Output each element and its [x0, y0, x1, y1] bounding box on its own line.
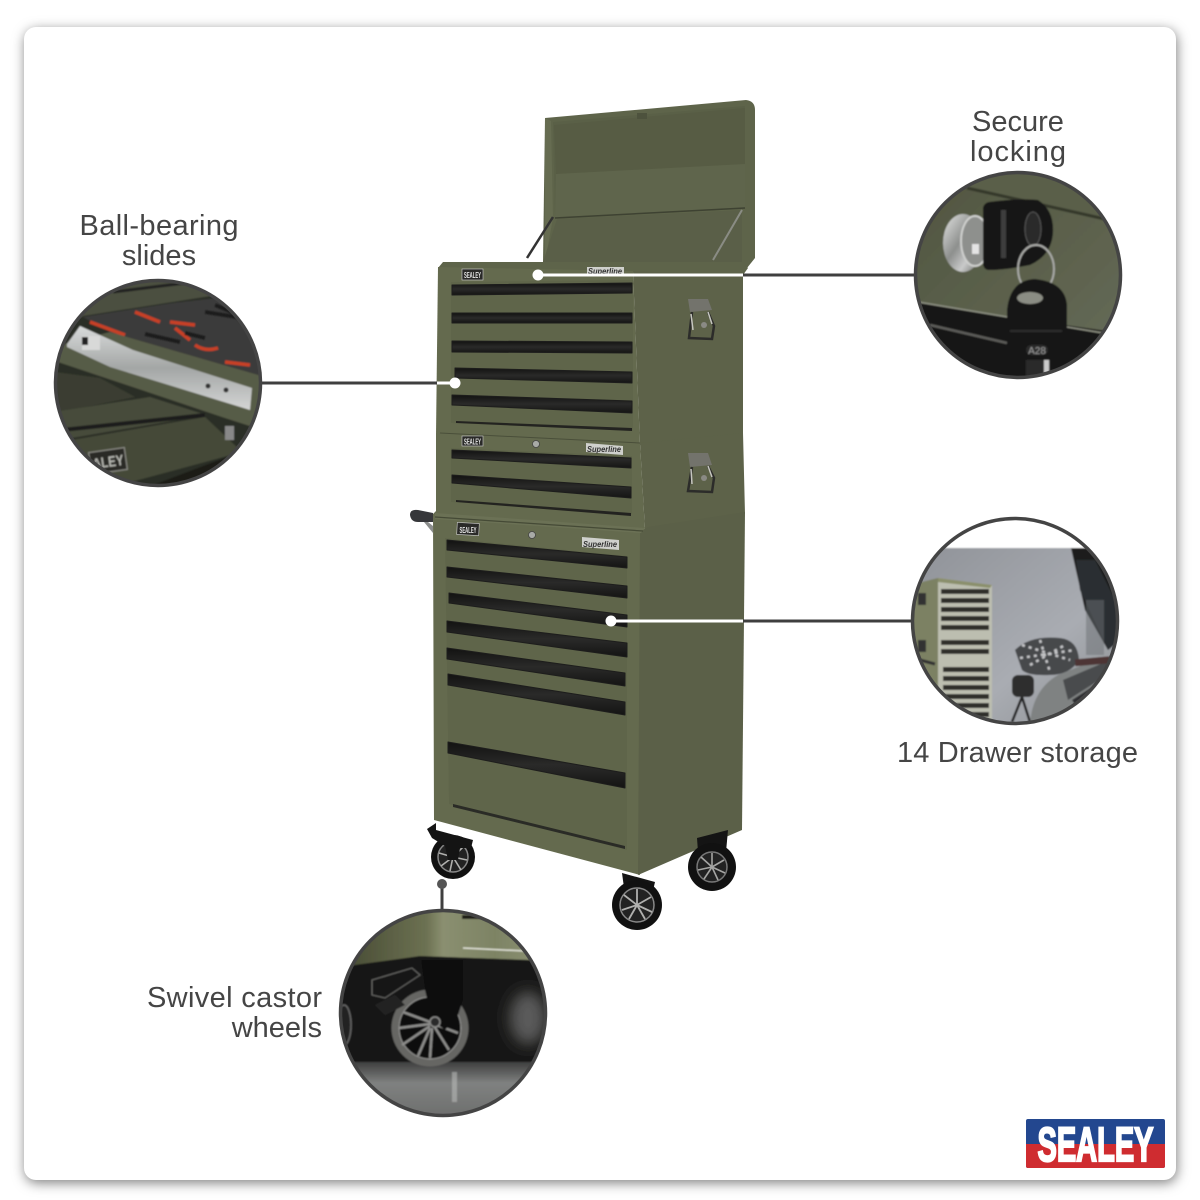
drawer handles [452, 283, 632, 413]
latch [688, 453, 714, 492]
badge: Superline: Superline [583, 540, 618, 549]
badge: Sealey: SEALEY [464, 271, 481, 280]
callout: 14 drawer storage [897, 515, 1138, 769]
label: 14 Drawer storage [897, 737, 1138, 769]
label [80, 210, 238, 272]
badge: Sealey: SEALEY [464, 438, 481, 446]
lock [528, 532, 536, 538]
callout: ball-bearing slides [55, 210, 262, 490]
badge: Sealey [457, 522, 479, 536]
label: locking [970, 136, 1066, 168]
recessed drawer frame [451, 280, 633, 431]
label: slides [122, 240, 196, 272]
photo circle: drawer slide [55, 280, 262, 490]
photo circle: drawer slide: ALEY [92, 452, 125, 473]
label: Swivel castor [147, 982, 322, 1014]
callout: secure locking [915, 106, 1121, 380]
callout: swivel castor wheels [147, 905, 546, 1122]
wheel: rear right [688, 830, 736, 891]
label: Secure [972, 106, 1064, 138]
photo circle: key and lock: A28 [1028, 346, 1046, 357]
wheel: front left with brake [427, 823, 475, 879]
callout lines [262, 270, 916, 911]
open lid [527, 100, 755, 268]
label [147, 982, 322, 1044]
lock [532, 440, 540, 448]
top chest [436, 262, 748, 445]
drawer handles [447, 540, 627, 788]
wheel: front right [612, 873, 662, 930]
badge: Superline: Superline [588, 267, 623, 276]
drawer handles [452, 450, 631, 498]
badge: Sealey: SEALEY [460, 526, 477, 535]
middle chest [436, 433, 745, 530]
handle bar [410, 510, 433, 533]
photo circle: key and lock [915, 172, 1121, 380]
badge: Sealey [462, 436, 483, 446]
badge: Superline [582, 537, 619, 550]
latch [688, 299, 714, 339]
label: wheels [231, 1012, 322, 1044]
tool chest product [410, 100, 755, 930]
badge: Sealey [462, 269, 483, 280]
badge: Superline: Superline [587, 445, 622, 454]
bottom cabinet [433, 511, 745, 875]
photo circle: castor wheel [337, 905, 546, 1122]
photo circle: cabinet in garage [910, 515, 1120, 728]
label [970, 106, 1066, 168]
label: Ball-bearing [80, 210, 238, 242]
